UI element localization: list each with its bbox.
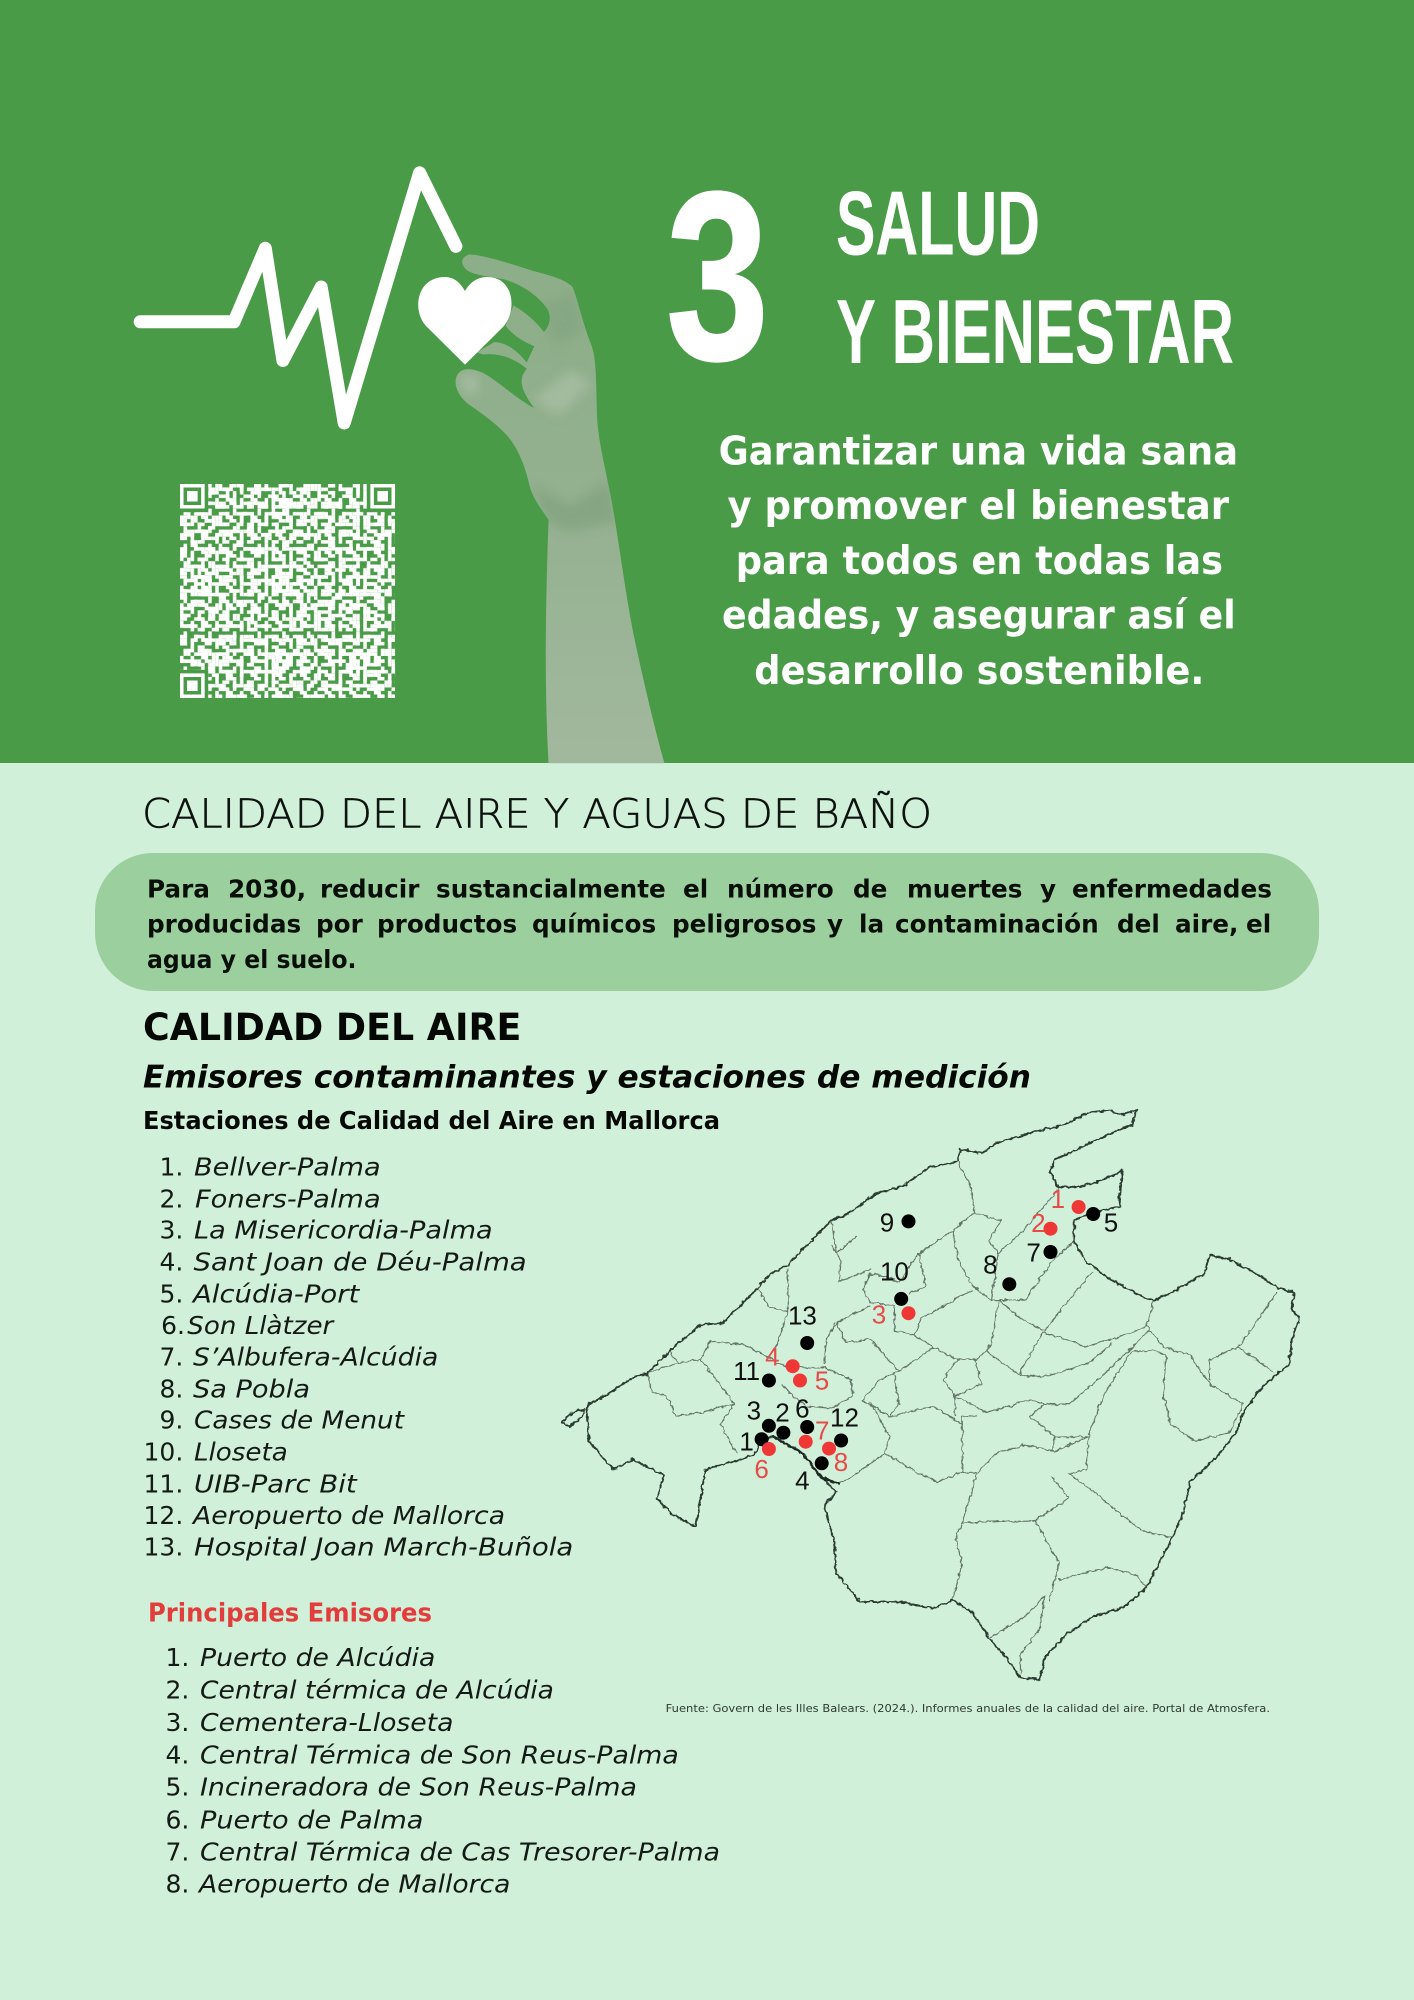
callout text: [147, 874, 1272, 974]
list: main emitters: 3.: [165, 1708, 189, 1737]
list: main emitters: 7.: [165, 1838, 189, 1867]
panel: target callout: [95, 853, 1319, 991]
station number labels: 6: [795, 1394, 810, 1424]
station number labels: 11: [733, 1356, 760, 1386]
list: air quality stations: 1.: [159, 1153, 183, 1182]
callout text: el: [683, 874, 708, 903]
list: main emitters: Puerto de Alcúdia: [200, 1643, 435, 1672]
list: main emitters: 1.: [165, 1643, 189, 1672]
list: air quality stations: Lloseta: [194, 1438, 288, 1467]
emitter number labels: 2: [1031, 1208, 1046, 1238]
list: main emitters: Incineradora de Son Reus-Palma: [200, 1773, 637, 1802]
station number labels: 12: [830, 1402, 859, 1432]
goal description: edades, y asegurar así el: [722, 593, 1236, 638]
emitter number labels: 7: [815, 1415, 829, 1445]
section heading: CALIDAD DEL AIRE Y AGUAS DE BAÑO: [142, 790, 932, 838]
station number labels: 7: [1026, 1238, 1041, 1268]
heading: principales emisores: Principales Emisores: [148, 1599, 432, 1629]
list: air quality stations: 6.: [161, 1311, 185, 1340]
list: air quality stations: 4.: [159, 1248, 183, 1277]
list: air quality stations: 3.: [159, 1216, 183, 1245]
station number labels: 1: [739, 1426, 754, 1456]
goal number 3: 3: [666, 142, 769, 410]
callout text: Para: [147, 874, 210, 903]
station number labels: 8: [983, 1250, 998, 1280]
callout text: y: [1040, 874, 1056, 903]
callout text: del: [1117, 910, 1160, 939]
emitter number labels: 1: [1051, 1184, 1065, 1214]
callout text: 2030,: [228, 874, 306, 903]
icon: white heart: [418, 277, 511, 365]
list: air quality stations: Hospital Joan March-Buñola: [194, 1533, 573, 1562]
emitter markers: [762, 1200, 1086, 1456]
list: main emitters: 2.: [165, 1675, 189, 1704]
subheading: emisores: Emisores contaminantes y estaciones de medición: [143, 1059, 1031, 1095]
subheading: estaciones: Estaciones de Calidad del Aire en Mallorca: [143, 1106, 720, 1135]
callout text: producidas: [147, 910, 301, 939]
emitter number labels: 5: [815, 1366, 829, 1396]
list: air quality stations: S’Albufera-Alcúdia: [193, 1343, 438, 1372]
list: air quality stations: UIB-Parc Bit: [194, 1469, 358, 1498]
station number labels: [733, 1207, 1118, 1496]
callout text: el: [1246, 910, 1271, 939]
list: air quality stations: 2.: [159, 1184, 183, 1213]
source note: Fuente: Govern de les Illes Balears. (2024.). Informes anuales de la calidad del aire. Portal de Atmosfera.: [666, 1702, 1270, 1715]
callout text: enfermedades: [1072, 874, 1272, 903]
emitter number labels: 3: [872, 1300, 886, 1330]
station number labels: 9: [880, 1207, 894, 1237]
list: air quality stations: Cases de Menut: [194, 1405, 405, 1434]
station number labels: 10: [880, 1257, 909, 1287]
goal title: SALUD: [836, 174, 1040, 274]
callout text: sustancialmente: [436, 874, 666, 903]
list: main emitters: 4.: [165, 1740, 189, 1769]
callout text: por: [316, 910, 364, 939]
list: main emitters: Central térmica de Alcúdia: [200, 1675, 554, 1704]
list: air quality stations: Foners-Palma: [195, 1184, 381, 1213]
callout text: la: [859, 910, 884, 939]
callout text: muertes: [907, 874, 1022, 903]
air quality station markers: [755, 1207, 1100, 1470]
emitter number labels: 4: [765, 1342, 780, 1372]
list: main emitters: Aeropuerto de Mallorca: [197, 1870, 510, 1899]
callout text: productos: [377, 910, 517, 939]
callout text: aire,: [1175, 910, 1238, 939]
list: air quality stations: La Misericordia-Palma: [194, 1216, 493, 1245]
callout text: y: [827, 910, 843, 939]
list: main emitters: Central Térmica de Cas Tresorer-Palma: [200, 1838, 720, 1867]
list: air quality stations: Aeropuerto de Mallorca: [191, 1501, 505, 1530]
station number labels: 2: [775, 1398, 790, 1428]
goal description: [719, 429, 1238, 694]
station number labels: 4: [795, 1466, 810, 1496]
list: air quality stations: 13.: [144, 1533, 183, 1562]
list: air quality stations: Alcúdia-Port: [191, 1279, 361, 1308]
list: air quality stations: 9.: [159, 1405, 183, 1434]
list: air quality stations: Bellver-Palma: [194, 1153, 381, 1182]
callout text: de: [853, 874, 887, 903]
list: air quality stations: 12.: [144, 1501, 183, 1530]
callout text: número: [727, 874, 834, 903]
goal description: y promover el bienestar: [728, 484, 1230, 529]
callout text: contaminación: [895, 910, 1099, 939]
list: main emitters: Central Térmica de Son Reus-Palma: [200, 1740, 679, 1769]
list: main emitters: 6.: [165, 1805, 189, 1834]
goal description: desarrollo sostenible.: [754, 649, 1204, 694]
list: air quality stations: Sa Pobla: [193, 1374, 310, 1403]
list: main emitters: 5.: [165, 1773, 189, 1802]
callout text: agua y el suelo.: [147, 945, 356, 974]
panel: green header: [0, 0, 1414, 763]
icon: heartbeat line: [140, 173, 456, 423]
station number labels: 5: [1104, 1208, 1118, 1238]
goal title: [836, 174, 1234, 383]
QR code: [180, 484, 395, 698]
goal description: Garantizar una vida sana: [719, 429, 1238, 474]
emitter number labels: [754, 1184, 1065, 1484]
list: air quality stations: 11.: [144, 1469, 183, 1498]
callout text: químicos: [532, 910, 656, 939]
list: main emitters: [165, 1643, 720, 1899]
station number labels: 3: [747, 1396, 761, 1426]
goal description: para todos en todas las: [736, 539, 1223, 584]
map of Mallorca: [562, 1110, 1299, 1680]
list: air quality stations: [144, 1153, 573, 1562]
list: air quality stations: 10.: [144, 1438, 183, 1467]
list: air quality stations: 7.: [159, 1343, 183, 1372]
emitter number labels: 6: [754, 1454, 769, 1484]
list: main emitters: Puerto de Palma: [200, 1805, 423, 1834]
heading: calidad del aire: CALIDAD DEL AIRE: [143, 1005, 521, 1049]
list: main emitters: 8.: [165, 1870, 189, 1899]
emitter number labels: 8: [834, 1447, 848, 1477]
icon: hand photo: [456, 254, 664, 763]
list: air quality stations: Sant Joan de Déu-Palma: [194, 1248, 527, 1277]
station number labels: 13: [788, 1300, 817, 1330]
list: main emitters: Cementera-Lloseta: [200, 1708, 453, 1737]
list: air quality stations: 8.: [159, 1374, 183, 1403]
list: air quality stations: Son Llàtzer: [187, 1311, 335, 1340]
callout text: peligrosos: [672, 910, 816, 939]
map outline and municipal boundaries: [562, 1110, 1299, 1680]
list: air quality stations: 5.: [159, 1279, 183, 1308]
callout text: reducir: [320, 874, 420, 903]
